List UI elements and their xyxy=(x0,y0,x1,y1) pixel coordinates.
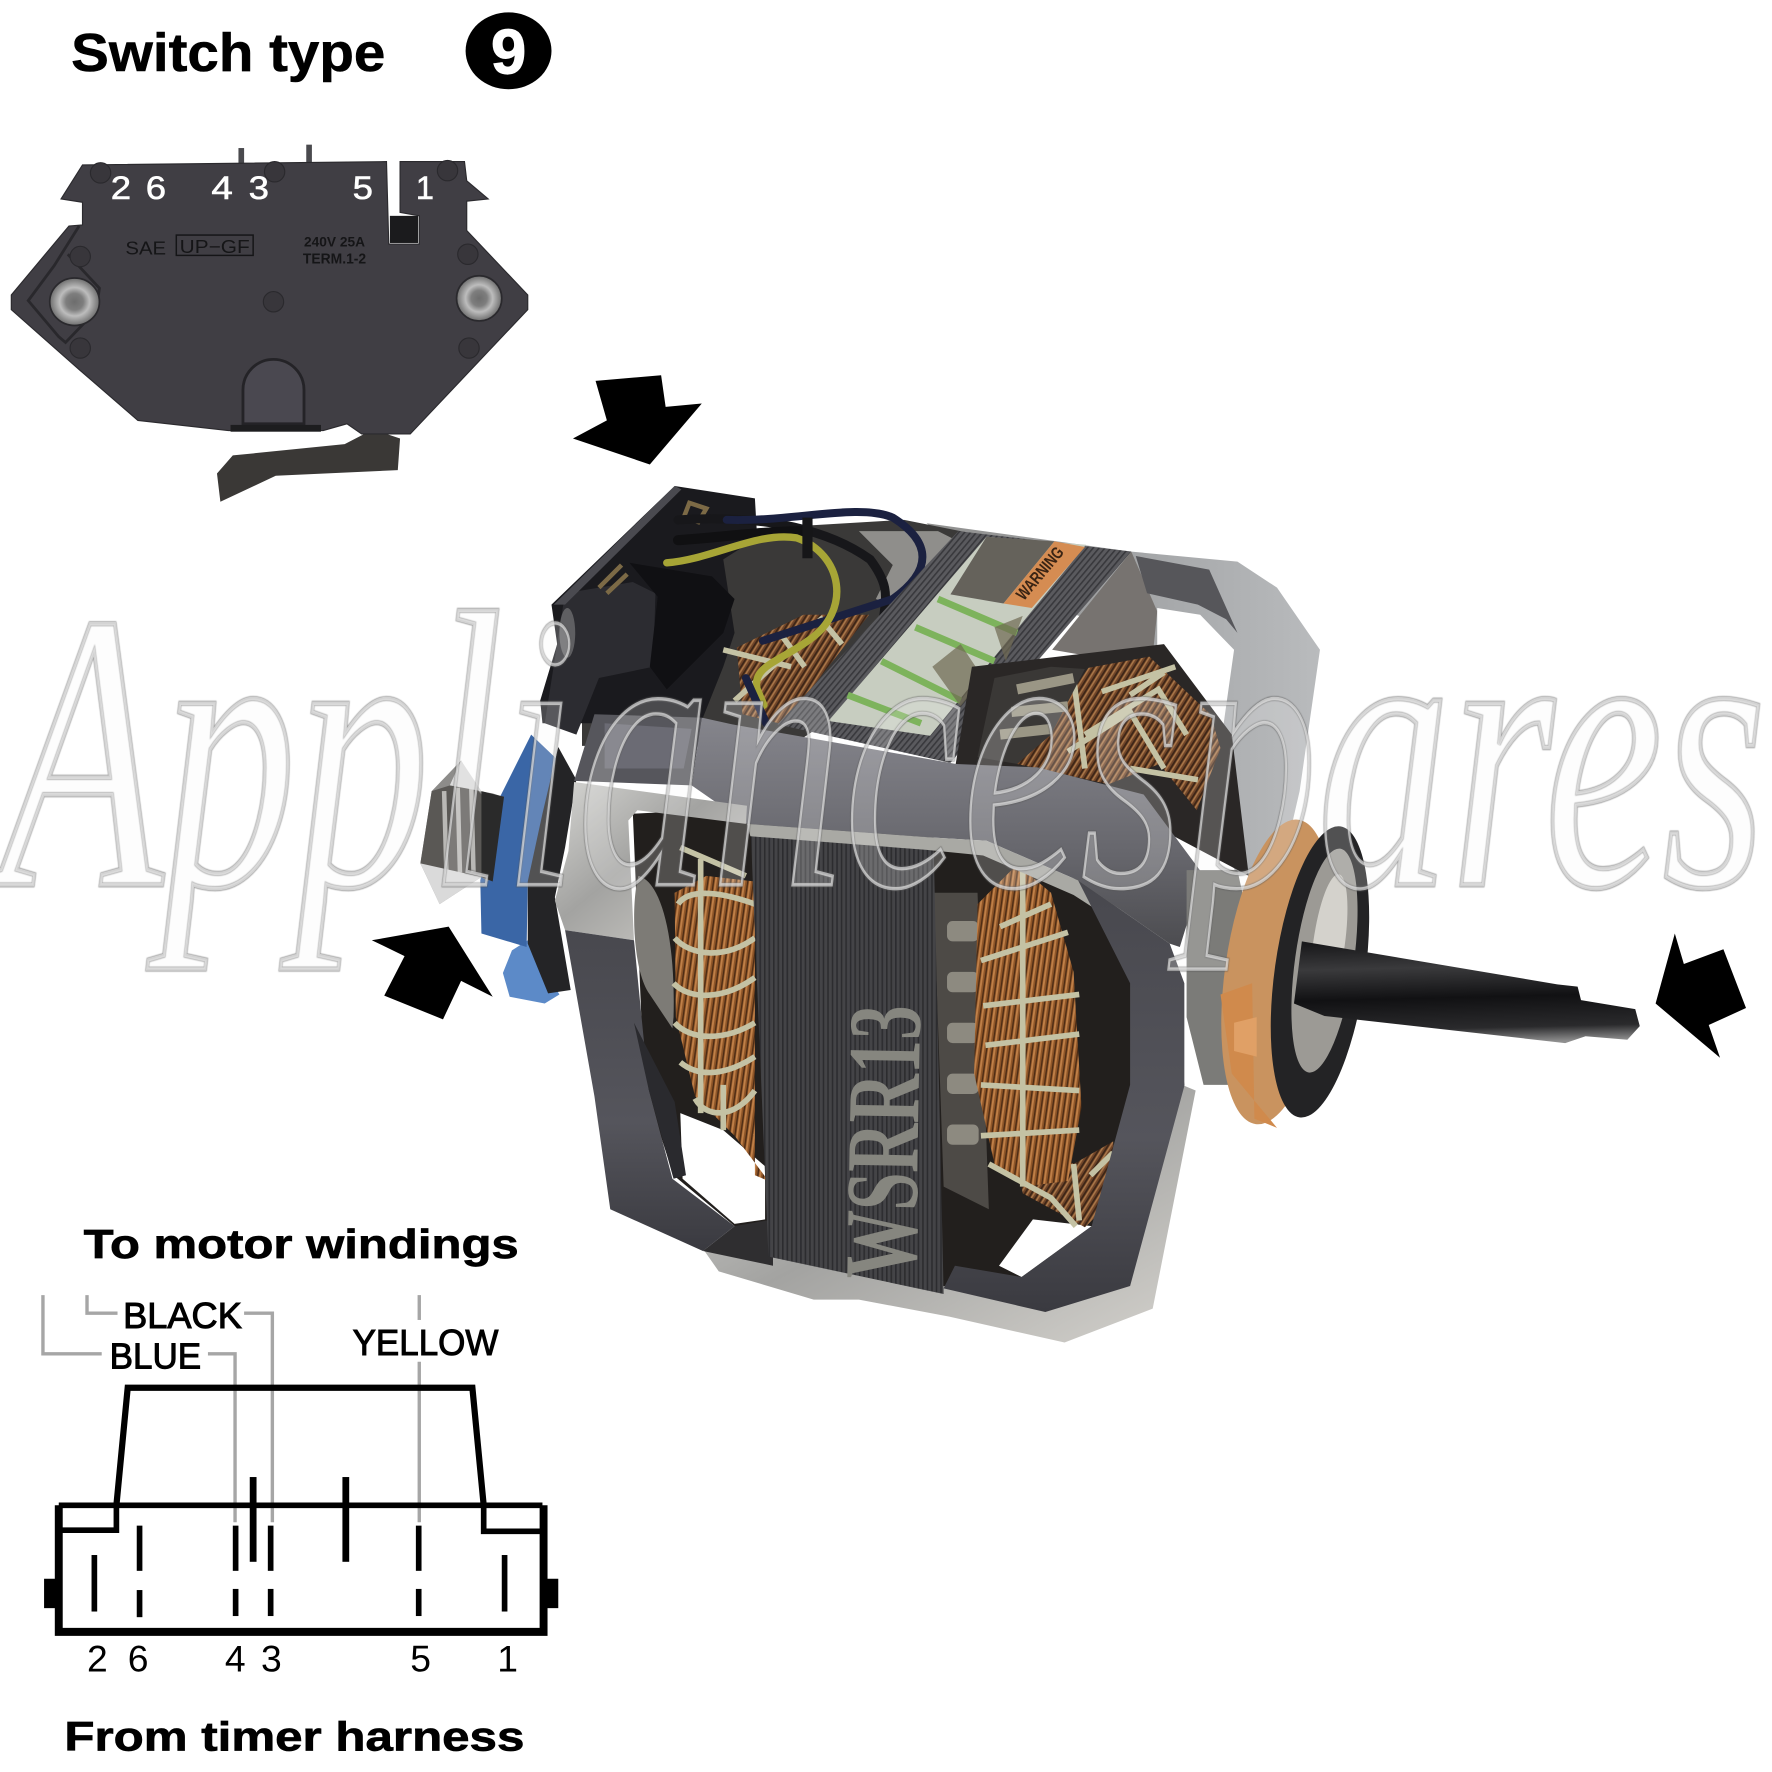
core stamp: WSRR13 xyxy=(823,1004,943,1280)
title: Switch type xyxy=(71,23,385,83)
terminal numbers: 1 xyxy=(497,1637,518,1679)
laminate side block xyxy=(1052,551,1157,667)
wiring diagram xyxy=(43,1221,558,1760)
screws xyxy=(50,276,502,325)
terminal numbers: 6 xyxy=(146,169,166,206)
rating label xyxy=(828,537,1086,736)
lead wires xyxy=(667,512,922,723)
orange ring xyxy=(1204,812,1350,1131)
right front limb xyxy=(944,880,1184,1312)
right coil bolts xyxy=(933,893,989,1209)
recess detail xyxy=(28,226,99,342)
rear left winding xyxy=(723,615,869,724)
rotor ring xyxy=(634,876,674,1028)
moulded markings xyxy=(125,234,366,267)
moulded markings: SAE xyxy=(125,238,166,258)
tube xyxy=(692,718,1202,947)
terminal numbers: 5 xyxy=(353,169,373,206)
pins xyxy=(238,145,312,164)
terminal numbers: 3 xyxy=(261,1637,282,1679)
motor photo xyxy=(420,486,1640,1343)
rear window xyxy=(1157,608,1234,746)
right coil xyxy=(974,865,1115,1227)
heading: from timer harness: From timer harness xyxy=(64,1714,524,1760)
bolt heads xyxy=(947,921,979,1145)
terminal numbers xyxy=(111,169,434,206)
silver casting behind wires xyxy=(859,531,961,610)
right rear winding xyxy=(978,657,1221,810)
lever xyxy=(217,429,400,502)
threaded hub xyxy=(420,761,504,904)
dark backing under right winding xyxy=(955,644,1249,876)
heading: to motor windings: To motor windings xyxy=(84,1221,519,1267)
terminal numbers: 5 xyxy=(410,1637,431,1679)
lower left joint xyxy=(703,1219,773,1266)
badge: type 9: 9 xyxy=(491,17,526,87)
blue fan xyxy=(480,735,559,1004)
wire labels: BLUE xyxy=(110,1336,201,1377)
moulded markings: TERM.1-2 xyxy=(303,251,366,267)
backing behind wires xyxy=(582,520,972,746)
tube edge shine xyxy=(747,824,1175,961)
terminals xyxy=(92,1477,507,1617)
inner left rail xyxy=(634,1023,686,1179)
rating label: WARNING xyxy=(1013,544,1068,604)
left front limb silver xyxy=(555,782,747,940)
wire labels: BLACK xyxy=(123,1295,242,1336)
bottom silver strip xyxy=(703,1085,1196,1343)
wire labels xyxy=(110,1295,498,1377)
upper casing shine xyxy=(605,723,692,768)
switch photo xyxy=(11,145,528,502)
right housing xyxy=(1187,870,1254,1085)
terminal numbers: 3 xyxy=(249,169,269,206)
top lamination band xyxy=(778,531,1131,763)
terminal numbers xyxy=(87,1637,518,1679)
terminal numbers: 1 xyxy=(416,169,434,206)
terminal numbers: 4 xyxy=(211,169,233,206)
connector outline xyxy=(59,1388,544,1632)
lower windows xyxy=(680,1113,1092,1277)
moulding dots xyxy=(70,160,479,358)
moulded markings: 240V 25A xyxy=(304,234,365,249)
terminal numbers: 6 xyxy=(128,1637,148,1679)
badge: type 9 xyxy=(466,12,551,89)
interior shadow xyxy=(633,808,1184,1288)
terminal numbers: 2 xyxy=(111,169,131,206)
rear hoop xyxy=(927,523,1320,876)
arrow: right xyxy=(1656,933,1746,1058)
central lamination core xyxy=(750,824,944,1294)
moulded markings: UP−GF xyxy=(180,237,250,257)
upper casing xyxy=(574,714,702,785)
motor shaft xyxy=(1294,941,1640,1043)
terminal numbers: 2 xyxy=(87,1637,108,1679)
dark ring xyxy=(528,747,576,993)
left front limb dark xyxy=(565,930,735,1251)
arrow: left xyxy=(372,927,493,1019)
wire labels: YELLOW xyxy=(353,1322,498,1363)
switch body xyxy=(11,162,528,434)
terminal block xyxy=(540,486,757,735)
side tabs xyxy=(44,1579,558,1608)
hoop shadow xyxy=(1136,556,1237,633)
bearing xyxy=(1255,820,1385,1124)
arrow: top xyxy=(573,375,702,464)
terminal numbers: 4 xyxy=(225,1637,246,1679)
left coil xyxy=(674,848,768,1181)
wire leads xyxy=(43,1295,419,1522)
